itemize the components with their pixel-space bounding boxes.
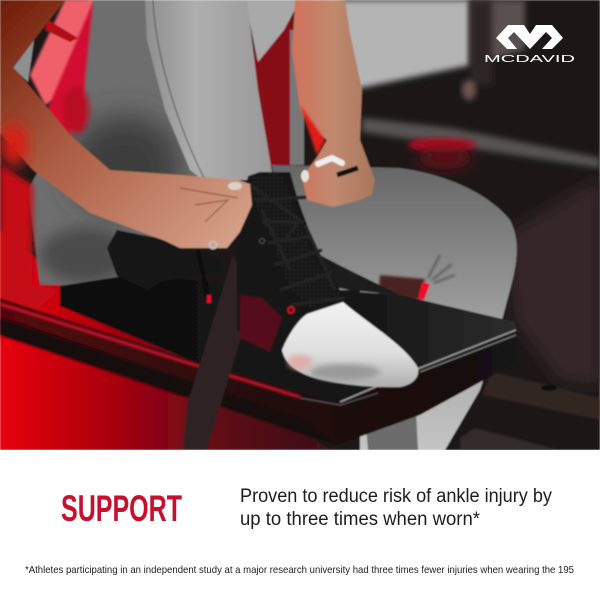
red lit floor: [0, 230, 330, 450]
grey post: [290, 30, 304, 165]
gym background: [0, 0, 600, 450]
brace strap: [183, 255, 400, 450]
photo contents: [0, 0, 600, 450]
far leg: [28, 0, 200, 285]
logo: [486, 25, 574, 62]
grey top of shorts: [245, 0, 300, 62]
red shirt: [0, 0, 93, 340]
bench front face: [0, 298, 517, 445]
ankle brace: [237, 172, 348, 357]
red vertical post: [254, 0, 292, 165]
heading: support: SUPPORT: [61, 488, 182, 529]
hanging lace: [198, 250, 211, 303]
bench top: [60, 275, 517, 404]
thigh under bench: [272, 165, 517, 450]
logo mark: [496, 25, 563, 49]
claim text: Proven to reduce risk of ankle injury by: [240, 486, 552, 507]
white caption band: [0, 450, 600, 600]
foam block: [106, 230, 205, 290]
grey wedge behind shirt: [13, 40, 34, 82]
sock: [282, 302, 418, 387]
photo: athlete lacing an ankle brace on a bench: [0, 0, 600, 450]
logo wordmark: MCDAVID: [484, 54, 575, 65]
claim text: up to three times when worn*: [240, 509, 481, 530]
claim text: [240, 486, 552, 530]
left arm and hand: [0, 0, 252, 248]
bent leg calf: [145, 0, 272, 182]
right arm and hand: [292, 0, 375, 207]
